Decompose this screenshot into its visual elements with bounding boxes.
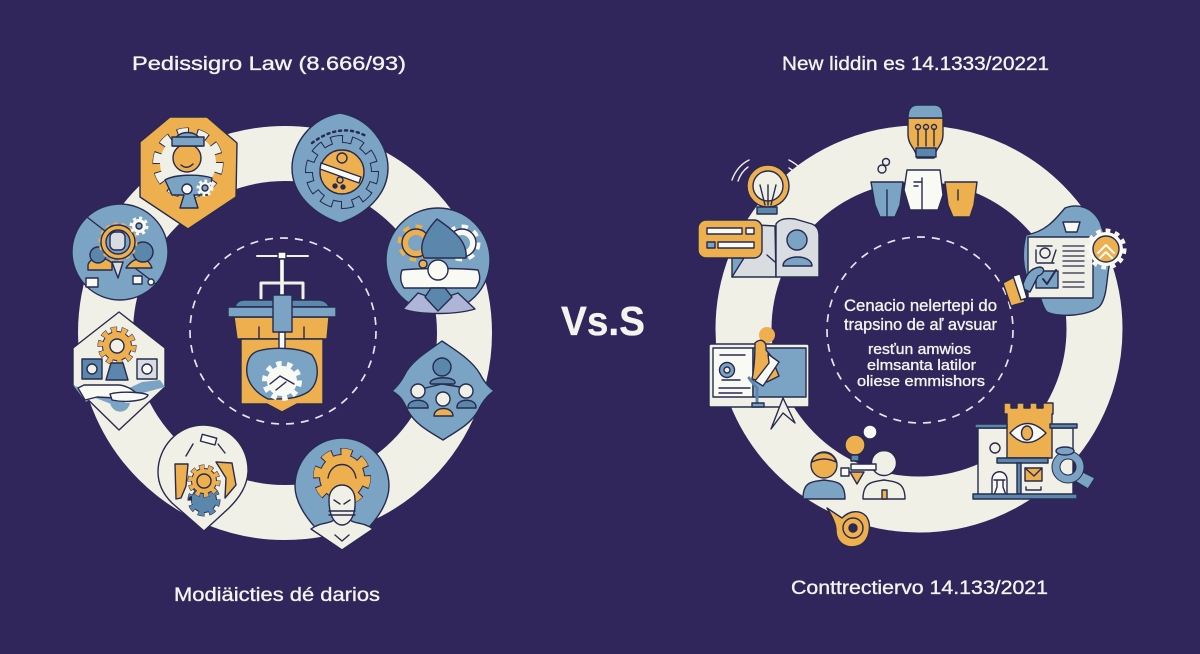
- icon: blue diamond with team hierarchy: [392, 341, 494, 440]
- icon: blue pin with gear-head figure: [295, 438, 389, 550]
- text block: right center description: [844, 296, 997, 390]
- icon: building with eye tower and magnifier: [973, 403, 1095, 499]
- icon: central press with handshake gear: [228, 252, 336, 412]
- left dashed circle: [190, 238, 376, 424]
- icon: worker in orange hexagon: [140, 117, 237, 229]
- icon: cream pin with interlocking gears: [158, 425, 248, 531]
- icon: lightbulb over open book with callout: [698, 160, 819, 277]
- text block: right center description: oliese emmishors: [857, 374, 985, 390]
- text block: right center description: resťun amwios: [868, 342, 971, 358]
- title: left heading: Pedissigro Law (8.666/93): [132, 54, 406, 75]
- vs label: Vs.S: [561, 298, 645, 344]
- caption: right bottom label: Conttrectiervo 14.133/2021: [791, 578, 1048, 599]
- icon: blue circle with gears and figure: [386, 208, 490, 314]
- title: right heading: New liddin es 14.1333/20221: [782, 54, 1049, 75]
- text block: right center description: elmsanta latilor: [867, 358, 976, 374]
- text block: right center description: Cenacio nelertepi do: [844, 296, 997, 315]
- right dashed circle: [827, 237, 1013, 423]
- caption: left bottom label: Modiäicties dé darios: [174, 585, 380, 606]
- icon: document with hand and gear badge: [1003, 206, 1123, 315]
- icon: top lightbulb with three cups: [871, 105, 977, 217]
- icon: cream hexagon with gear and open hand: [73, 312, 165, 430]
- icon: monitor with seated figure and cursor: [709, 327, 809, 429]
- text block: right center description: trapsino de aľ avsuar: [844, 315, 997, 334]
- right ring: [744, 154, 1094, 504]
- icon: orange swirl tag: [827, 508, 869, 547]
- icon: blue shield gear with orange disc: [292, 113, 388, 223]
- left ring: [106, 154, 464, 512]
- icon: blue circle with magnifier gear and people: [72, 204, 168, 300]
- icon: two people sharing an idea: [803, 425, 905, 499]
